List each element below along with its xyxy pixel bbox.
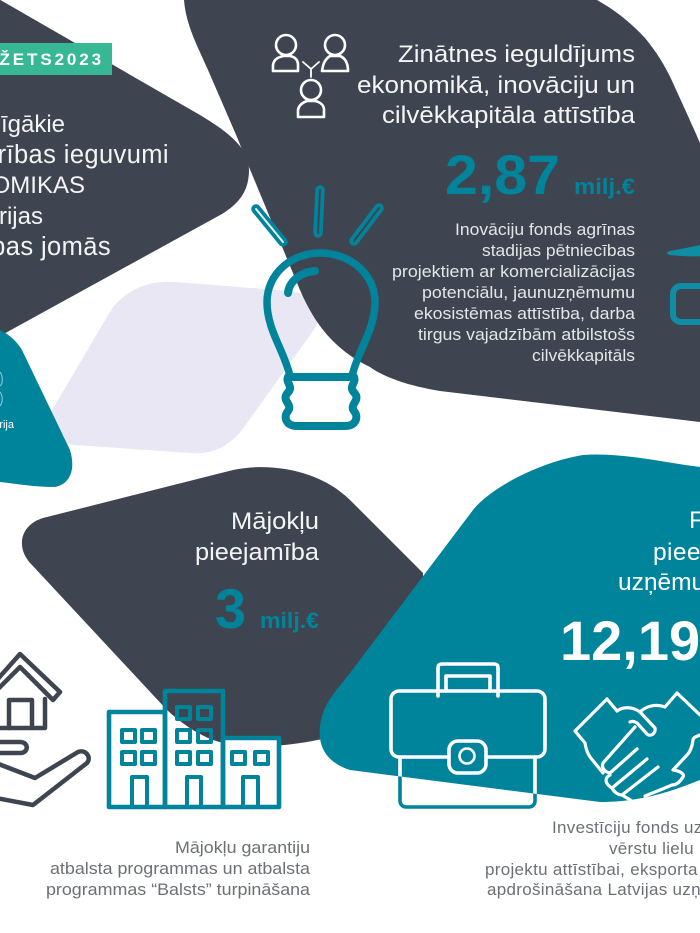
heading: housing: Mājokļu bbox=[231, 508, 319, 535]
heading: science investment: cilvēkkapitāla attīstība bbox=[382, 102, 636, 129]
text block: science description: cilvēkkapitāls bbox=[532, 346, 635, 365]
icon: briefcase teal part bbox=[400, 757, 535, 807]
text block: science description bbox=[392, 220, 636, 365]
panel: business finance teal shape bbox=[320, 454, 700, 802]
number: 3 milj.€: milj.€ bbox=[260, 608, 319, 633]
text block: housing description: programmas “Balsts” turpināšana bbox=[46, 881, 311, 899]
icon: apartment buildings bbox=[109, 691, 279, 807]
heading: science investment bbox=[357, 41, 636, 129]
panel: left dark heading shape bbox=[0, 0, 249, 336]
hashtag tag bbox=[0, 43, 112, 75]
text block: housing description: atbalsta programmas un atbalsta bbox=[50, 860, 311, 878]
text block: business finance description bbox=[485, 818, 700, 899]
icon: cropped right edge element bbox=[667, 244, 700, 322]
text block: science description: ekosistēmas attīstība, darba bbox=[414, 304, 636, 323]
heading: housing: pieejamība bbox=[195, 539, 320, 566]
icon: briefcase white part bbox=[391, 664, 545, 807]
heading: science investment: ekonomikā, inovāciju un bbox=[357, 72, 635, 99]
icon: light bulb bbox=[256, 190, 379, 426]
number: 3 milj.€: 3 bbox=[215, 577, 246, 640]
text block: housing description: Mājokļu garantiju bbox=[175, 839, 310, 857]
heading: housing bbox=[195, 508, 320, 566]
number: 2,87 milj.€: 2,87 bbox=[445, 143, 560, 206]
panel: science investment dark shape bbox=[184, 0, 700, 422]
icon: handshake bbox=[575, 693, 700, 801]
ministry logo text bbox=[0, 372, 15, 431]
icon: house on hand bbox=[0, 654, 89, 805]
number: 2,87 milj.€ bbox=[445, 143, 635, 206]
text block: science description: tirgus vajadzībām atbilstošs bbox=[418, 325, 635, 344]
heading: science investment: Zinātnes ieguldījums bbox=[398, 41, 635, 68]
number: 3 milj.€ bbox=[215, 577, 319, 640]
text block: science description: Inovāciju fonds agrīnas bbox=[455, 220, 635, 239]
text block: science description: potenciālu, jaunuzņēmumu bbox=[422, 283, 635, 302]
text block: housing description bbox=[46, 839, 311, 899]
icon: three connected people bbox=[273, 35, 348, 117]
heading: main left title bbox=[0, 111, 169, 261]
lavender background shape bbox=[49, 282, 319, 453]
panel: ministry teal shape bbox=[0, 330, 72, 487]
number: 2,87 milj.€: milj.€ bbox=[574, 174, 635, 199]
heading: business finance bbox=[618, 507, 700, 596]
text block: science description: stadijas pētniecības bbox=[482, 241, 635, 260]
text block: science description: projektiem ar komercializācijas bbox=[392, 262, 635, 281]
panel: housing dark shape bbox=[22, 467, 423, 746]
